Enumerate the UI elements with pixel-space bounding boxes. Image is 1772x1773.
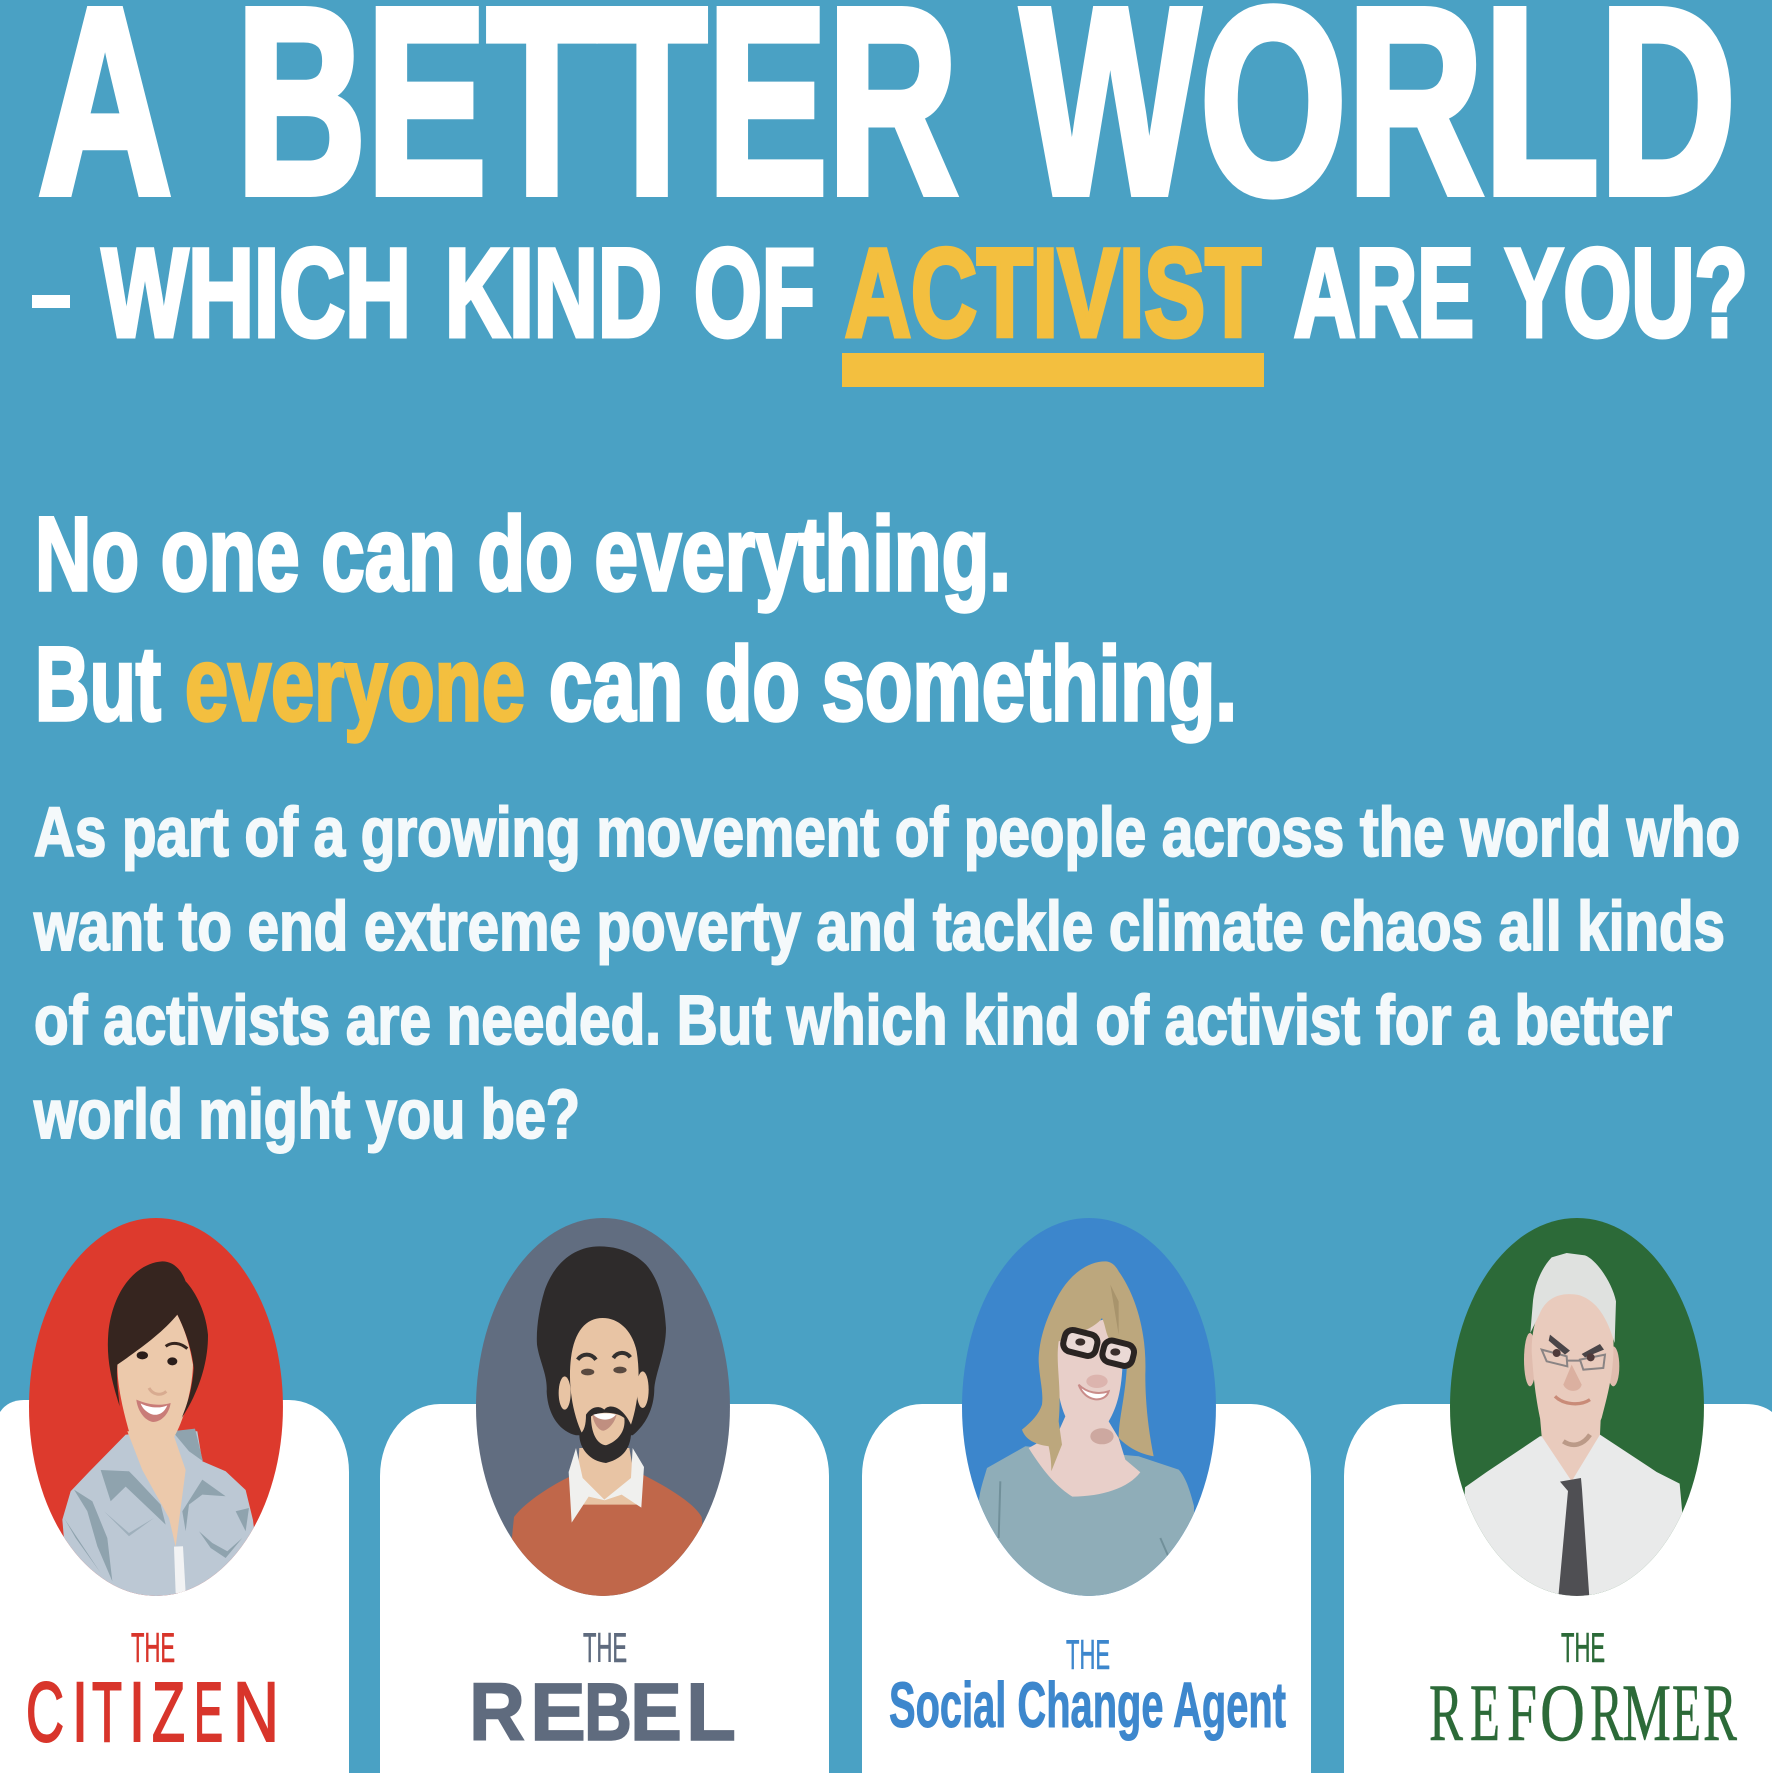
label: the reformer: E <box>1470 1667 1500 1758</box>
label: the reformer: F <box>1507 1667 1537 1758</box>
slogan: can do something. <box>549 626 1237 743</box>
label: the social change agent <box>889 1631 1286 1741</box>
intro paragraph <box>33 793 1740 1153</box>
label: the citizen: N <box>233 1665 279 1759</box>
label: the rebel <box>469 1624 736 1758</box>
label: the reformer: M <box>1622 1667 1671 1758</box>
label: the citizen: E <box>194 1665 223 1759</box>
subtitle: which kind of activist are you: KIND <box>445 224 662 363</box>
label: the rebel: L <box>686 1667 736 1758</box>
label: the rebel: THE <box>583 1624 627 1671</box>
label: the reformer: R <box>1703 1667 1737 1758</box>
subtitle: which kind of activist are you: ARE <box>1294 224 1474 363</box>
label: the citizen <box>26 1624 279 1759</box>
label: the reformer: THE <box>1561 1624 1605 1671</box>
slogan <box>35 496 1237 743</box>
portrait: reformer <box>1450 1218 1704 1598</box>
label: the citizen: THE <box>131 1624 175 1671</box>
label: the social change agent: THE <box>1066 1631 1110 1678</box>
label: the citizen: C <box>26 1665 64 1759</box>
label: the reformer <box>1429 1624 1737 1758</box>
title: A BETTER WORLD <box>38 0 1736 250</box>
label: the citizen: Z <box>152 1665 185 1759</box>
card: social change agent <box>862 1404 1311 1773</box>
portrait: citizen <box>29 1218 283 1598</box>
label: the reformer: O <box>1540 1667 1585 1758</box>
subtitle: which kind of activist are you: ACTIVIST <box>845 224 1261 363</box>
label: the rebel: E <box>630 1667 682 1758</box>
subtitle: which kind of activist are you: WHICH <box>102 224 411 363</box>
portrait: social change agent <box>962 1218 1216 1598</box>
label: the reformer: R <box>1429 1667 1463 1758</box>
subtitle: which kind of activist are you <box>32 224 1748 363</box>
label: the social change agent: Social Change Agent <box>889 1669 1286 1741</box>
subtitle: which kind of activist are you: OF <box>694 224 815 363</box>
label: the citizen: T <box>92 1665 122 1759</box>
slogan: But <box>35 626 161 743</box>
label: the reformer: E <box>1672 1667 1701 1758</box>
label: the citizen: I <box>129 1665 145 1759</box>
label: the reformer: R <box>1590 1667 1623 1758</box>
card: citizen <box>0 1400 349 1773</box>
card: reformer <box>1344 1404 1772 1773</box>
card: rebel <box>380 1404 829 1773</box>
label: the citizen: I <box>72 1665 88 1759</box>
label: the rebel: B <box>584 1667 632 1758</box>
label: the rebel: E <box>530 1667 586 1758</box>
slogan: everyone <box>185 626 525 743</box>
portrait: rebel <box>476 1218 730 1598</box>
label: the rebel: R <box>469 1667 525 1758</box>
activist underline <box>842 353 1264 387</box>
slogan: No one can do everything. <box>35 496 1011 613</box>
intro paragraph: world might you be? <box>33 1075 580 1153</box>
